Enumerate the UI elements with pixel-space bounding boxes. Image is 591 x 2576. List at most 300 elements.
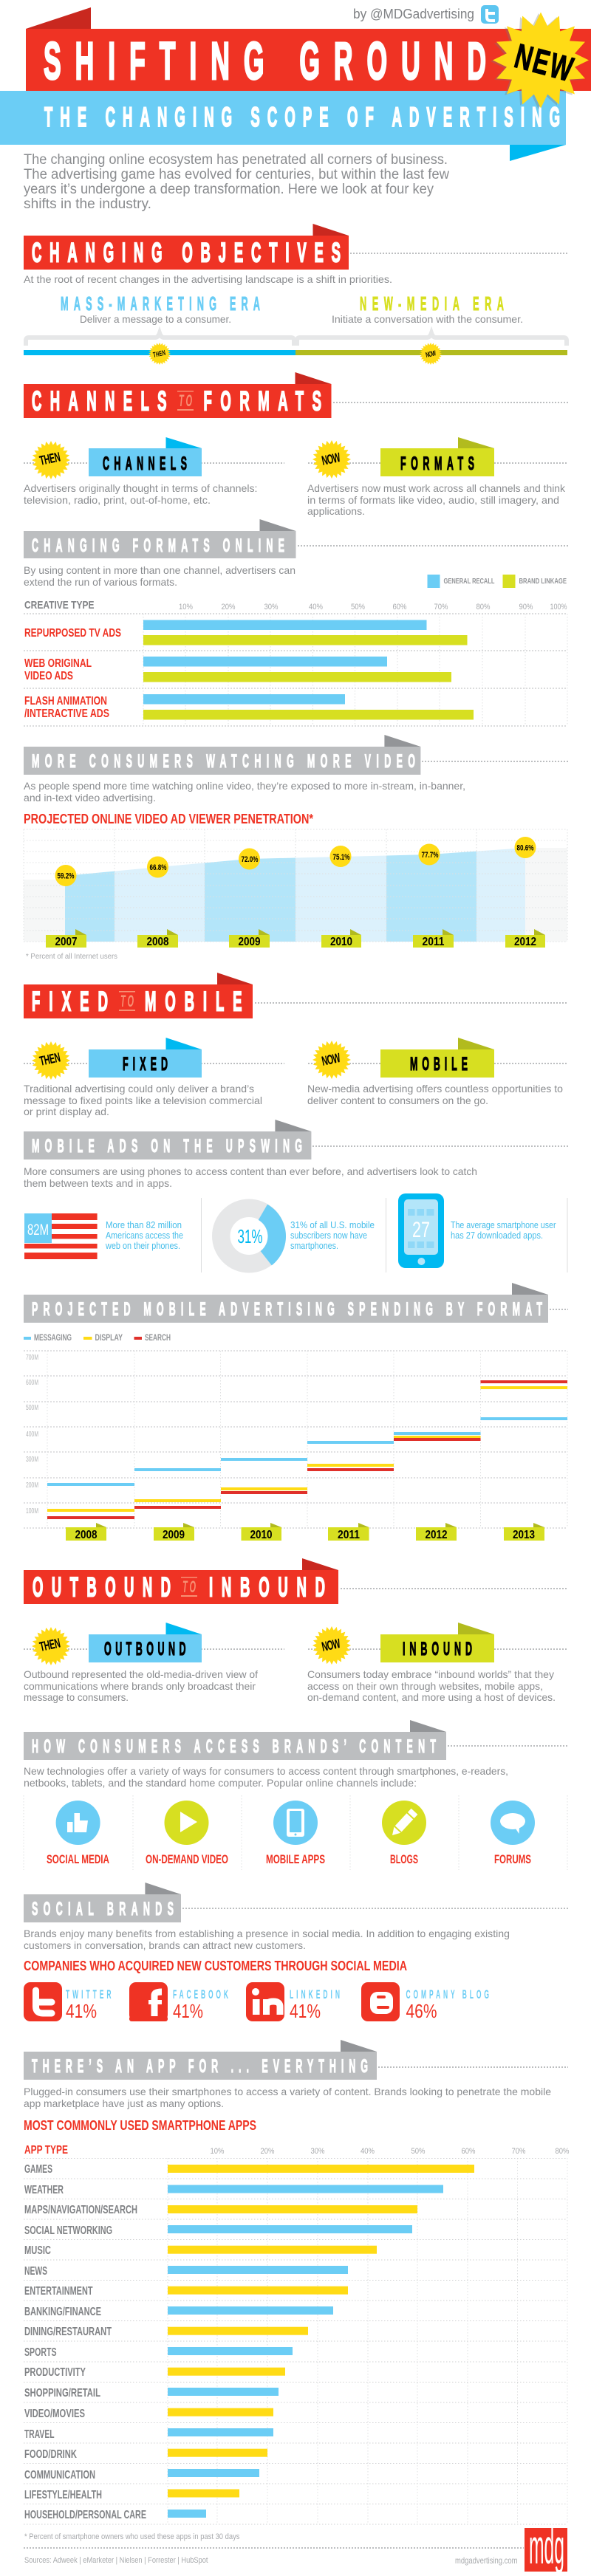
panel: fixed then (24, 1038, 284, 1117)
fixed description: Traditional advertising could only deliver a brand’s (24, 1083, 254, 1095)
then star (32, 1627, 70, 1665)
channels tag (89, 437, 202, 476)
label: mobile apps: MOBILE APPS (266, 1852, 325, 1866)
sources: Sources: Adweek | eMarketer | Nielsen | Forrester | HubSpot (24, 2556, 208, 2565)
row: shopping: SHOPPING/RETAIL (24, 2387, 100, 2399)
outbound description: Outbound represented the old-media-driven view of (24, 1668, 258, 1680)
axis labels: 80% (476, 603, 491, 612)
series: display (47, 1388, 567, 1510)
stat: 27 apps: has 27 downloaded apps. (451, 1230, 543, 1241)
row: food (24, 2448, 267, 2461)
row: web original video ads (24, 657, 451, 682)
text: more time watching video (24, 780, 465, 804)
stat: 31% (290, 1219, 375, 1251)
icon: linkedin (246, 1982, 284, 2021)
section heading: changing objectives (24, 224, 568, 270)
text: phones (24, 1165, 477, 1189)
heading: most commonly used smartphone apps: MOST COMMONLY USED SMARTPHONE APPS (24, 2118, 256, 2133)
row: communication: COMMUNICATION (24, 2469, 95, 2481)
data point 2007 (55, 865, 77, 886)
row: sports (24, 2346, 293, 2359)
year tag 2008 (66, 1523, 106, 1541)
icon: on-demand video play (164, 1801, 208, 1845)
icon: smartphone with 27: 27 (412, 1218, 430, 1242)
mass-marketing era heading: MASS-MARKETING ERA (61, 294, 260, 315)
panel: inbound now (307, 1623, 568, 1703)
axis labels: 10% (179, 603, 193, 612)
row: maps (24, 2204, 417, 2216)
text: more time watching video: and in-text video advertising. (24, 792, 156, 804)
row: music: MUSIC (24, 2244, 51, 2257)
outbound description: communications where brands only broadcast their (24, 1680, 256, 1692)
row: web original video ads: VIDEO ADS (24, 670, 73, 682)
icon: facebook (129, 1982, 168, 2021)
formats description (307, 482, 566, 517)
mobile tag: MOBILE (410, 1054, 468, 1075)
axis labels: 100% (550, 603, 567, 612)
fixed tag (89, 1038, 202, 1078)
new starburst (491, 12, 589, 109)
icon: social media thumbs up (56, 1801, 100, 1845)
now star (312, 1041, 351, 1079)
icon: blogs pencil (382, 1801, 426, 1845)
inbound description: on-demand content, and more using a host of devices. (307, 1691, 556, 1703)
then star (32, 1041, 70, 1080)
text: plugged-in consumers: Plugged-in consumers use their smartphones to access a variety of content. Brands looking to penetrate the mobile (24, 2086, 551, 2097)
section heading: mobile ads on the upswing (24, 1120, 568, 1159)
panel: outbound then (24, 1623, 284, 1703)
y axis labels: 700M (26, 1354, 38, 1362)
now star: NOW (425, 349, 437, 359)
formats description: Advertisers now must work across all channels and think (307, 482, 566, 494)
stat: twitter: TWITTER (66, 1987, 112, 2001)
intro text: years it’s undergone a deep transformation. Here we look at four key (24, 182, 434, 197)
axis labels: 20% (222, 603, 236, 612)
y axis labels: 300M (26, 1456, 38, 1464)
label: blogs: BLOGS (390, 1852, 418, 1866)
formats tag (380, 437, 494, 476)
donut chart: 31% (221, 1205, 286, 1265)
byline: MDG advertising twitter: by @MDGadvertising (353, 7, 474, 21)
chart: mobile ad spending by format (24, 1351, 567, 1541)
row: social networking (24, 2224, 412, 2237)
row: video: VIDEO/MOVIES (24, 2408, 85, 2420)
text: extend the run: By using content in more than one channel, advertisers can (24, 564, 296, 576)
stat: company blog (406, 1987, 489, 2022)
chart title: PROJECTED ONLINE VIDEO AD VIEWER PENETRATION* (24, 812, 313, 826)
text: brands benefits (24, 1928, 510, 1951)
stat: twitter: 41% (66, 2000, 97, 2022)
text: phones: More consumers are using phones to access content than ever before, and advertisers look to catch (24, 1165, 477, 1177)
year tag 2009: 2009 (238, 936, 261, 948)
year tag 2011 (413, 929, 454, 948)
stat: 82 million: web on their phones. (105, 1240, 180, 1251)
year tag 2012 (416, 1523, 457, 1541)
row: sports: SPORTS (24, 2346, 56, 2359)
outbound tag (89, 1623, 202, 1662)
section heading: more consumers watching more video (24, 735, 568, 775)
year tag 2012 (505, 929, 545, 948)
row: dining: DINING/RESTAURANT (24, 2326, 112, 2338)
row: news (24, 2265, 348, 2278)
label: on-demand video: ON-DEMAND VIDEO (146, 1852, 228, 1866)
section heading: fixed to mobile: FIXED (32, 987, 108, 1017)
outbound tag: OUTBOUND (104, 1639, 185, 1659)
now star: NOW (321, 1637, 342, 1655)
text: extend the run: extend the run of various formats. (24, 576, 177, 588)
row: social networking: SOCIAL NETWORKING (24, 2224, 112, 2237)
fixed description (24, 1083, 262, 1117)
legend: spending: SEARCH (145, 1332, 171, 1343)
new-media text: Initiate a conversation with the consumer. (332, 313, 523, 325)
then star: THEN (38, 1637, 62, 1655)
bar chart: smartphone apps (24, 2144, 570, 2524)
now star (420, 343, 442, 365)
now star (312, 1626, 351, 1665)
panel: channels then (24, 437, 284, 506)
text: brands benefits: Brands enjoy many benefits from establishing a presence in social media. In addition to engaging existing (24, 1928, 510, 1939)
row: flash animation (24, 694, 474, 720)
icon: forums speech bubble (491, 1801, 535, 1845)
stat: 31%: 31% of all U.S. mobile (290, 1219, 375, 1230)
new label: NEW (510, 36, 577, 89)
row: banking: BANKING/FINANCE (24, 2306, 101, 2318)
channels description (24, 482, 257, 506)
section heading: outbound to inbound: INBOUND (209, 1573, 325, 1603)
row: dining (24, 2326, 308, 2338)
year tag 2009: 2009 (163, 1529, 185, 1541)
year tag 2009 (229, 929, 270, 948)
text: new technologies (24, 1765, 508, 1789)
section heading: channels to formats: CHANNELS (32, 387, 166, 417)
row: travel (24, 2428, 273, 2441)
section heading: social brands: SOCIAL BRANDS (32, 1899, 174, 1919)
axis labels: 50% (351, 603, 365, 612)
footer (24, 2519, 567, 2574)
fixed description: or print display ad. (24, 1106, 109, 1117)
section heading: outbound to inbound (24, 1558, 568, 1604)
section heading: fixed to mobile: TO (120, 992, 134, 1010)
data point 2008 (147, 857, 168, 877)
row: maps: MAPS/NAVIGATION/SEARCH (24, 2204, 137, 2216)
heading: companies who acquired new customers: COMPANIES WHO ACQUIRED NEW CUSTOMERS THROUGH SOCIAL MEDIA (24, 1959, 407, 1973)
row: music (24, 2244, 377, 2257)
stat: linkedin: 41% (290, 2000, 321, 2022)
stat: 27 apps: The average smartphone user (451, 1219, 556, 1230)
text: plugged-in consumers: app marketplace have just as many options. (24, 2097, 224, 2109)
data point 2007: 59.2% (58, 871, 75, 880)
row: repurposed tv ads: REPURPOSED TV ADS (24, 627, 121, 640)
axis labels: 70% (434, 603, 448, 612)
then star: THEN (152, 349, 166, 359)
data point 2011: 77.7% (421, 851, 439, 860)
axis labels: 70% (511, 2147, 526, 2156)
row: games: GAMES (24, 2163, 52, 2176)
legend: spending: MESSAGING (34, 1332, 72, 1343)
year tag 2011 (328, 1523, 369, 1541)
axis labels: 50% (411, 2147, 426, 2156)
year tag 2013 (504, 1523, 544, 1541)
row: news: NEWS (24, 2265, 47, 2278)
chart legend: GENERAL RECALL (443, 577, 495, 586)
formats description: applications. (307, 505, 365, 517)
y axis labels: 500M (26, 1404, 38, 1412)
year tag 2010: 2010 (250, 1529, 273, 1541)
stat: facebook: FACEBOOK (173, 1987, 228, 2001)
row: entertainment: ENTERTAINMENT (24, 2285, 93, 2298)
section heading: changing objectives: CHANGING OBJECTIVES (32, 239, 341, 268)
bar chart: creative type (24, 599, 567, 726)
year tag 2010 (321, 929, 361, 948)
byline: MDG advertising twitter (353, 5, 499, 24)
mass-marketing text: Deliver a message to a consumer. (80, 313, 231, 325)
year tag 2012: 2012 (426, 1529, 448, 1541)
data point 2010 (329, 846, 352, 867)
brace: now (297, 333, 567, 346)
donut chart: 31%: 31% (238, 1225, 263, 1247)
section heading: projected mobile advertising spending (24, 1283, 568, 1323)
intro text: The changing online ecosystem has penetrated all corners of business. (24, 152, 448, 168)
year tag 2011: 2011 (338, 1529, 360, 1541)
axis title: APP TYPE (24, 2144, 68, 2157)
inbound description: access on their own through websites, mobile apps, (307, 1680, 543, 1692)
then star: THEN (38, 1051, 62, 1069)
now star: NOW (321, 451, 342, 469)
mobile description: deliver content to consumers on the go. (307, 1095, 488, 1106)
section heading: fixed to mobile (24, 973, 568, 1018)
stat: 31%: subscribers now have (290, 1230, 367, 1241)
row: household: HOUSEHOLD/PERSONAL CARE (24, 2509, 146, 2521)
row: shopping (24, 2387, 279, 2399)
data point 2008: 66.8% (149, 863, 167, 872)
data point 2012: 80.6% (517, 843, 534, 852)
axis labels: 10% (210, 2147, 225, 2156)
axis labels: 60% (393, 603, 407, 612)
stat: linkedin (290, 1987, 340, 2022)
intro text: The advertising game has evolved for centuries, but within the last few (24, 167, 449, 182)
data point 2010: 75.1% (332, 853, 350, 862)
series: search (47, 1382, 567, 1518)
area chart: video ad viewer penetration (24, 829, 567, 948)
data point 2012 (514, 837, 536, 858)
series: messaging (47, 1419, 567, 1484)
axis labels: 40% (361, 2147, 375, 2156)
logo: mdg (525, 2519, 567, 2574)
year tag 2013: 2013 (513, 1529, 535, 1541)
now star (312, 440, 351, 479)
legend: spending: DISPLAY (95, 1332, 123, 1343)
row: weather: WEATHER (24, 2184, 64, 2196)
data point 2011 (418, 843, 440, 866)
row: banking (24, 2306, 333, 2318)
legend: spending (24, 1332, 171, 1343)
section heading: social brands (24, 1883, 568, 1922)
website: mdgadvertising.com (455, 2555, 517, 2566)
stat: 82 million: More than 82 million (106, 1219, 182, 1230)
data point 2009: 72.0% (241, 855, 259, 864)
row: productivity: PRODUCTIVITY (24, 2366, 86, 2379)
inbound tag (380, 1623, 494, 1662)
year tag 2007: 2007 (55, 936, 78, 948)
y axis labels: 200M (26, 1481, 38, 1490)
axis labels: 20% (260, 2147, 275, 2156)
timeline then (24, 350, 296, 355)
mobile tag (380, 1038, 494, 1078)
stat: facebook (173, 1987, 228, 2022)
axis title: CREATIVE TYPE (24, 599, 95, 612)
row: food: FOOD/DRINK (24, 2448, 78, 2461)
chart legend: BRAND LINKAGE (519, 577, 567, 586)
section heading: channels to formats: TO (179, 391, 192, 410)
panel: online channels (24, 1795, 567, 1870)
row: weather (24, 2184, 443, 2196)
icon: flag with 82M (24, 1213, 98, 1259)
icon: twitter (24, 1982, 62, 2021)
then star (148, 343, 171, 365)
stat: company blog: COMPANY BLOG (406, 1987, 489, 2001)
axis labels: 90% (519, 603, 533, 612)
panel: social platforms (24, 1982, 489, 2022)
axis labels (179, 603, 567, 612)
section heading: projected mobile advertising spending: PROJECTED MOBILE ADVERTISING SPENDING BY FORMAT (32, 1299, 542, 1320)
row: travel: TRAVEL (24, 2428, 55, 2441)
row: productivity (24, 2366, 285, 2379)
year tag 2010: 2010 (330, 936, 352, 948)
axis labels: 30% (264, 603, 279, 612)
section heading: how consumers access brands' content (24, 1720, 568, 1760)
stat: 31%: smartphones. (290, 1240, 338, 1251)
stat: linkedin: LINKEDIN (290, 1987, 340, 2001)
row: repurposed tv ads (24, 620, 467, 645)
fixed description: message to fixed points like a television commercial (24, 1095, 262, 1106)
icon: smartphone with 27 (398, 1193, 444, 1268)
section heading: channels to formats (24, 372, 568, 418)
y axis labels: 400M (26, 1431, 38, 1439)
y axis labels: 600M (26, 1379, 38, 1387)
intro text (24, 152, 449, 212)
row: video (24, 2408, 273, 2420)
year tag 2009 (154, 1523, 194, 1541)
formats tag: FORMATS (400, 453, 474, 474)
year tag 2007 (46, 929, 86, 948)
inbound description (307, 1668, 556, 1703)
row: lifestyle: LIFESTYLE/HEALTH (24, 2489, 102, 2501)
title: SHIFTING GROUND (44, 31, 486, 90)
text: new technologies: New technologies offer a variety of ways for consumers to access content through smartphones, e-readers, (24, 1765, 508, 1777)
text: new technologies: netbooks, tablets, and the standard home computer. Popular online channels include: (24, 1777, 417, 1789)
axis labels: 30% (310, 2147, 325, 2156)
channels description: Advertisers originally thought in terms of channels: (24, 482, 257, 494)
axis labels: 40% (309, 603, 323, 612)
data point 2009 (239, 848, 260, 870)
section heading: outbound to inbound: OUTBOUND (33, 1573, 171, 1603)
text: plugged-in consumers (24, 2086, 551, 2109)
row: flash animation: FLASH ANIMATION (24, 695, 107, 708)
stat: facebook: 41% (173, 2000, 203, 2022)
text: extend the run (24, 564, 296, 588)
section heading: there's an app for everything (24, 2040, 568, 2080)
year tag 2010 (241, 1523, 281, 1541)
axis labels (210, 2147, 570, 2156)
year tag 2011: 2011 (423, 936, 445, 948)
row: entertainment (24, 2285, 348, 2298)
stat: 82 million (105, 1219, 183, 1251)
panel: formats now (307, 437, 568, 517)
then star (32, 441, 70, 479)
panel: mobile stats (24, 1193, 567, 1272)
row: web original video ads: WEB ORIGINAL (24, 657, 92, 670)
inbound description: Consumers today embrace “inbound worlds” that they (307, 1668, 554, 1680)
row: flash animation: /INTERACTIVE ADS (24, 708, 109, 720)
section heading: mobile ads on the upswing: MOBILE ADS ON THE UPSWING (32, 1136, 302, 1157)
year tag 2008 (137, 929, 178, 948)
now star: NOW (321, 1052, 342, 1069)
icon: company blog (361, 1982, 400, 2021)
year tag 2012: 2012 (514, 936, 536, 948)
inbound tag: INBOUND (403, 1639, 472, 1659)
year tag 2008: 2008 (146, 936, 169, 948)
timeline now (296, 350, 567, 355)
panel: mobile now (307, 1038, 568, 1106)
section heading: outbound to inbound: TO (182, 1578, 196, 1596)
channels description: television, radio, print, out-of-home, etc. (24, 494, 211, 506)
text: more time watching video: As people spend more time watching online video, they’re exposed to more in-stream, in-banner, (24, 780, 465, 792)
subtitle banner (0, 91, 566, 161)
axis labels: 80% (556, 2147, 570, 2156)
era comparison (24, 294, 567, 365)
channels tag: CHANNELS (103, 453, 187, 474)
label: forums: FORUMS (494, 1852, 531, 1866)
y axis labels: 100M (26, 1507, 38, 1515)
year tag 2008: 2008 (75, 1529, 98, 1541)
then star: THEN (38, 451, 62, 469)
section heading: channels to formats: FORMATS (204, 387, 321, 417)
fixed tag: FIXED (123, 1054, 168, 1075)
stat: 82 million: Americans access the (106, 1230, 183, 1241)
icon: twitter (481, 5, 499, 24)
mobile description (307, 1083, 563, 1106)
y axis labels (26, 1354, 38, 1515)
icon: flag with 82M: 82M (27, 1222, 49, 1239)
section heading: there's an app for everything: THERE’S AN APP FOR ... EVERYTHING (32, 2056, 368, 2077)
brace: then (26, 333, 294, 346)
stat: 27 apps (451, 1219, 556, 1241)
outbound description (24, 1668, 258, 1703)
label: social media: SOCIAL MEDIA (47, 1852, 109, 1866)
formats description: in terms of formats like video, audio, still imagery, and (307, 494, 559, 506)
row: communication (24, 2469, 259, 2481)
intro text: shifts in the industry. (24, 196, 151, 212)
new-media era heading: NEW-MEDIA ERA (360, 294, 504, 315)
outbound description: message to consumers. (24, 1691, 129, 1703)
section heading: changing formats online (24, 519, 568, 558)
text: phones: them between texts and in apps. (24, 1177, 172, 1189)
stat: company blog: 46% (406, 2000, 437, 2022)
section heading: how consumers access brands' content: HOW CONSUMERS ACCESS BRANDS’ CONTENT (32, 1736, 436, 1757)
text: brands benefits: customers in conversation, brands can attract new customers. (24, 1939, 306, 1951)
icon: mobile apps phone (273, 1801, 318, 1845)
chart legend (427, 575, 567, 588)
row: games (24, 2163, 474, 2176)
footnote: internet users: * Percent of all Internet users (26, 953, 117, 961)
row: lifestyle (24, 2489, 239, 2501)
text: root of changes: At the root of recent changes in the advertising landscape is a shift in priorities. (24, 273, 392, 285)
stat: twitter (66, 1987, 112, 2022)
axis labels: 60% (461, 2147, 476, 2156)
footnote: smartphone owners: * Percent of smartphone owners who used these apps in past 30 days (24, 2532, 240, 2541)
section heading: changing formats online: CHANGING FORMATS ONLINE (32, 535, 284, 556)
section heading: more consumers watching more video: MORE CONSUMERS WATCHING MORE VIDEO (32, 751, 415, 772)
